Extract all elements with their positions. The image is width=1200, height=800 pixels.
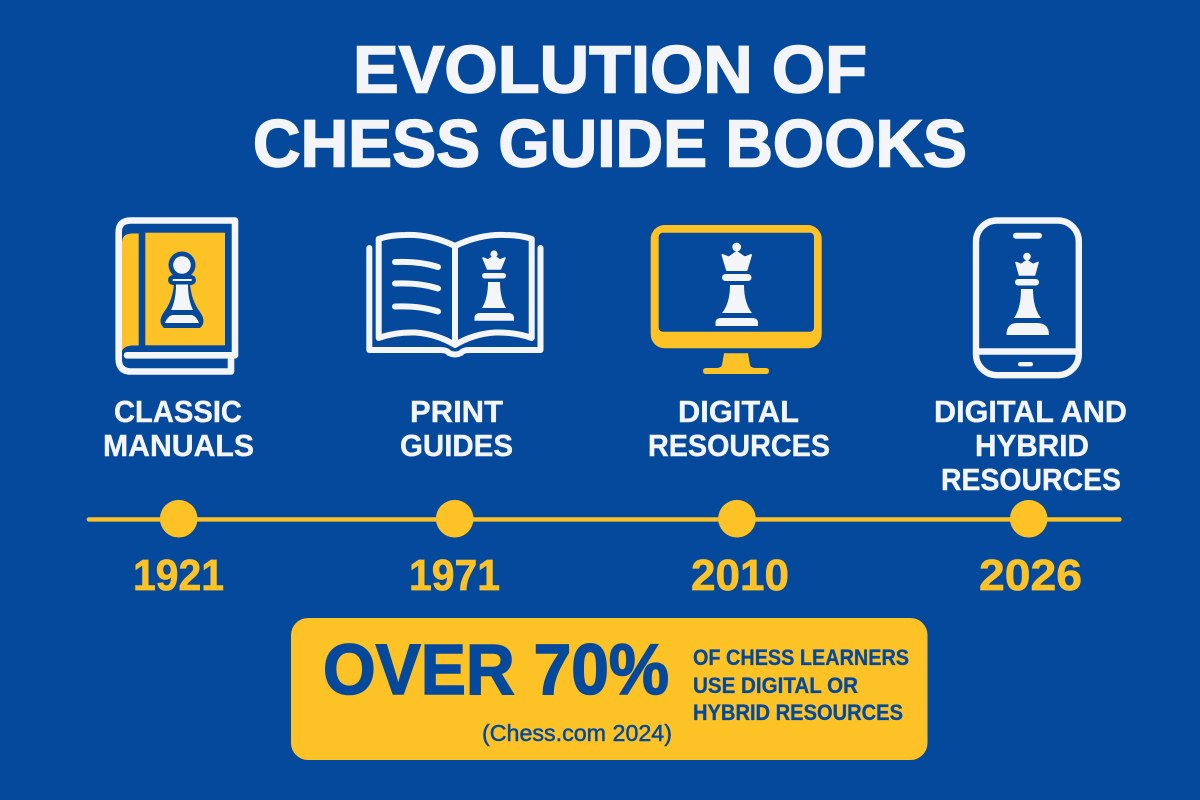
label: digital resources: RESOURCES xyxy=(648,428,830,463)
year 2026: 2026 xyxy=(979,551,1082,600)
year 2010: 2010 xyxy=(691,551,789,600)
statistic description xyxy=(693,645,909,725)
timeline dot: 1971 xyxy=(436,500,474,538)
label: digital and hybrid resources: RESOURCES xyxy=(941,462,1121,497)
years xyxy=(133,551,1082,600)
statistic description: USE DIGITAL OR xyxy=(693,673,858,698)
callout: statistic banner xyxy=(291,618,928,760)
label: print guides: PRINT xyxy=(410,394,503,429)
year 1971: 1971 xyxy=(409,551,500,600)
label: classic manuals: MANUALS xyxy=(103,428,254,463)
timeline dot: 1921 xyxy=(160,500,198,538)
label: digital and hybrid resources: DIGITAL AND xyxy=(934,394,1127,429)
icon: classic manual book with pawn xyxy=(119,220,235,372)
timeline dot: 2026 xyxy=(1010,500,1048,538)
title: EVOLUTION OF xyxy=(353,32,867,108)
title xyxy=(253,32,967,182)
statistic description: HYBRID RESOURCES xyxy=(693,700,903,725)
source: (Chess.com 2024) xyxy=(482,720,672,746)
statistic: over 70%: OVER 70% xyxy=(323,631,669,710)
icon: smartphone with queen xyxy=(976,220,1079,375)
timeline dot: 2010 xyxy=(718,500,756,538)
icon: desktop monitor with queen xyxy=(651,225,822,374)
label: classic manuals: CLASSIC xyxy=(114,394,242,429)
label: digital and hybrid resources xyxy=(934,394,1127,497)
label: digital resources: DIGITAL xyxy=(678,394,799,429)
label: print guides xyxy=(400,394,513,463)
label: classic manuals xyxy=(103,394,254,463)
icon: open print guide with queen xyxy=(369,235,540,354)
title: CHESS GUIDE BOOKS xyxy=(253,106,967,182)
label: print guides: GUIDES xyxy=(400,428,513,463)
label: digital resources xyxy=(648,394,830,463)
label: digital and hybrid resources: HYBRID xyxy=(975,428,1089,463)
year 1921: 1921 xyxy=(133,551,224,600)
timeline xyxy=(87,500,1122,538)
statistic description: OF CHESS LEARNERS xyxy=(693,645,909,670)
